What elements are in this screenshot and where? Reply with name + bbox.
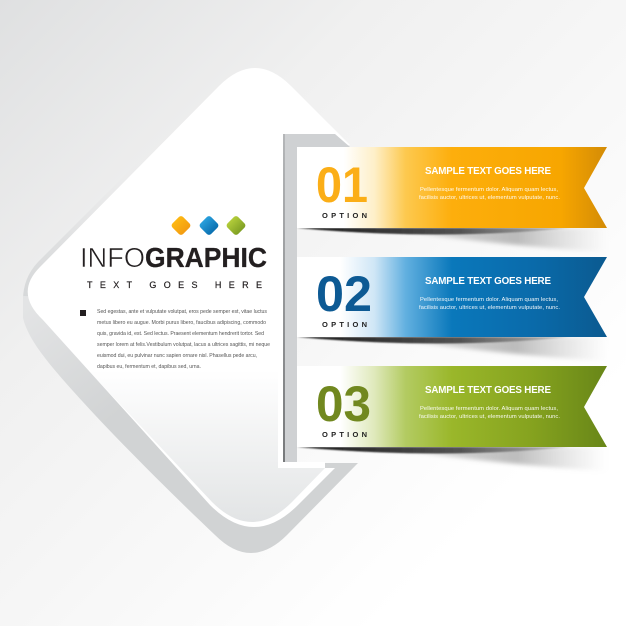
ribbon shadow	[297, 337, 607, 361]
option label: OPTION	[322, 211, 367, 220]
icon: green diamond	[225, 215, 247, 236]
frame inner edge	[283, 134, 285, 462]
option label: OPTION	[322, 320, 367, 329]
gray base diamond	[23, 296, 358, 553]
body text: metus libero eu augue. Morbi purus libero, faucibus adipiscing, commodo	[97, 320, 266, 326]
ribbon heading: SAMPLE TEXT GOES HERE	[425, 276, 551, 287]
ribbon body	[419, 187, 560, 201]
ribbon body: Pellentesque fermentum dolor. Aliquam quam lectus,	[420, 406, 558, 412]
ribbon shape	[297, 366, 607, 447]
icon: orange diamond	[170, 215, 192, 236]
ribbon body: facilisis auctor, ultrices ut, elementum vulputate, nunc.	[419, 414, 560, 420]
ribbon body	[419, 297, 560, 311]
ribbon body: facilisis auctor, ultrices ut, elementum vulputate, nunc.	[419, 195, 560, 201]
option label: OPTION	[322, 430, 367, 439]
body text: euismod dui, eu pulvinar nunc sapien ornare nisl. Phasellus pede arcu,	[97, 353, 257, 359]
frame panel	[278, 134, 350, 468]
body text: dapibus eu, fermentum et, dapibus sed, urna.	[97, 364, 201, 370]
number: 01	[316, 157, 368, 213]
title: INFO	[80, 242, 145, 273]
number: 03	[316, 376, 371, 432]
ribbon 03	[297, 366, 607, 471]
frame top and side	[283, 134, 350, 462]
ribbon 02	[297, 257, 607, 361]
icon: blue diamond	[198, 215, 220, 236]
ribbon body: Pellentesque fermentum dolor. Aliquam quam lectus,	[420, 297, 558, 303]
lower diamond shading	[88, 370, 325, 522]
ribbon body: Pellentesque fermentum dolor. Aliquam quam lectus,	[420, 187, 558, 193]
title: GRAPHIC	[145, 242, 267, 273]
subtitle: TEXT GOES HERE	[87, 280, 262, 290]
upper diamond rim	[23, 150, 156, 300]
ribbon body: facilisis auctor, ultrices ut, elementum vulputate, nunc.	[419, 305, 560, 311]
number: 02	[316, 266, 372, 322]
ribbon shadow	[297, 228, 607, 252]
ribbon body	[419, 406, 560, 420]
ribbon heading: SAMPLE TEXT GOES HERE	[425, 385, 551, 396]
body text: quis, gravida id, est. Sed lectus. Praesent elementum hendrerit tortor. Sed	[97, 331, 264, 337]
ribbon shape	[297, 257, 607, 337]
title	[80, 242, 267, 273]
body text	[97, 309, 270, 370]
body text: semper lorem at felis.Vestibulum volutpat, lacus a ultrices sagittis, mi neque	[97, 342, 270, 348]
body text: Sed egestas, ante et vulputate volutpat, eros pede semper est, vitae luctus	[97, 309, 267, 315]
white diamond panel	[28, 68, 350, 527]
white base strip	[278, 462, 325, 468]
ribbon 01	[297, 147, 607, 252]
bullet	[80, 310, 86, 316]
ribbon shape	[297, 147, 607, 228]
ribbon shadow	[297, 447, 607, 471]
icons: three small diamonds	[170, 215, 247, 236]
ribbon heading: SAMPLE TEXT GOES HERE	[425, 166, 551, 177]
